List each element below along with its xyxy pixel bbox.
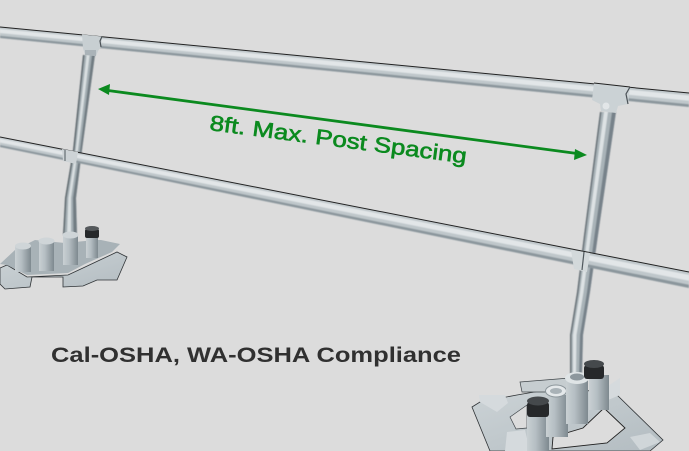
right base plate [472, 360, 663, 451]
right base black cap front [527, 396, 549, 417]
right post [570, 112, 616, 375]
spacing arrow [98, 84, 587, 160]
right base black cap rear [584, 360, 604, 379]
lower rail [0, 137, 689, 288]
compliance caption: Cal-OSHA, WA-OSHA Compliance [51, 344, 461, 367]
left post [63, 55, 95, 235]
right lower coupling [571, 250, 590, 272]
left base black cap [85, 226, 99, 238]
top rail [0, 27, 689, 107]
right base cylinders [527, 372, 609, 451]
left base plate [0, 226, 127, 289]
spacing label: 8ft. Max. Post Spacing [208, 111, 468, 168]
top right T fitting [592, 83, 630, 113]
top left T fitting [82, 34, 102, 56]
left lower coupling [62, 149, 78, 164]
